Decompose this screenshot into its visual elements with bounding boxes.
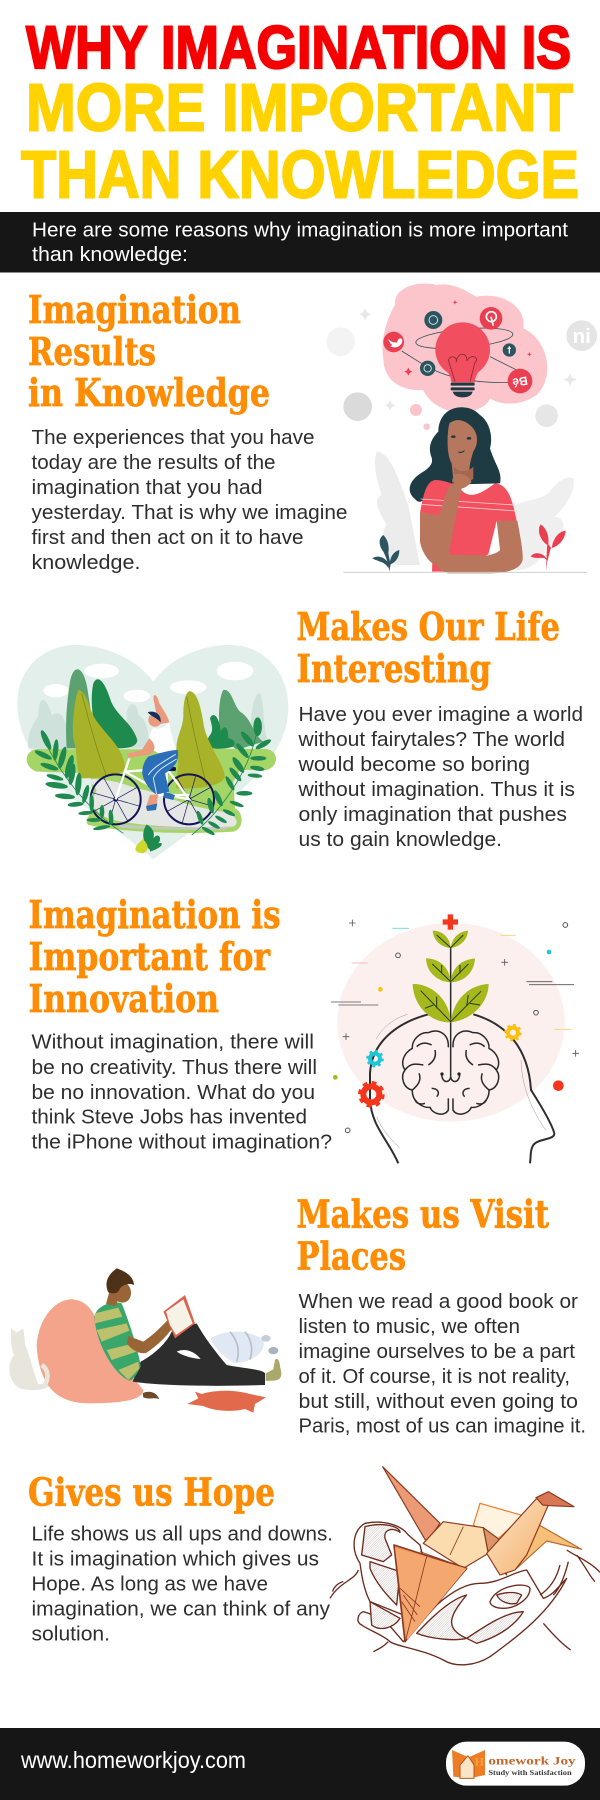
brain [403, 1031, 499, 1114]
text block: without imagination. Thus it is [297, 778, 575, 801]
text block: When we read a good book or [298, 1290, 578, 1313]
text block [32, 1522, 333, 1646]
heading [28, 287, 270, 415]
pink circle [337, 923, 565, 1122]
illustration: head with growing plant [331, 914, 579, 1163]
heading: Makes us Visit [296, 1192, 549, 1236]
cat [9, 1328, 50, 1390]
fern branches [34, 717, 272, 836]
text block: but still, without even going to [298, 1390, 578, 1413]
text block [32, 426, 348, 574]
faint social icons: ni [572, 325, 591, 348]
text block: be no creativity. Thus there will [32, 1056, 317, 1079]
text block: first and then act on it to have [32, 526, 304, 549]
rider [127, 695, 178, 811]
text block: only imagination that pushes [298, 803, 567, 826]
heading: Imagination is [28, 892, 280, 937]
illustration: person reading on beanbag [9, 1268, 281, 1413]
panel: imagination is important for innovation [28, 892, 579, 1163]
ground [27, 749, 276, 833]
heading: Places [296, 1234, 406, 1278]
heading: Important for [28, 934, 271, 979]
heading: Results [28, 329, 156, 374]
text block: imagination that you had [32, 476, 262, 499]
clouds [43, 662, 253, 702]
panel: makes us visit places [9, 1192, 586, 1438]
app icons [383, 300, 532, 393]
text block: think Steve Jobs has invented [32, 1106, 307, 1128]
thought cloud [382, 284, 547, 413]
text block: solution. [32, 1622, 110, 1646]
text block: Without imagination, there will [32, 1030, 314, 1054]
orbits [402, 325, 517, 383]
heading [296, 1192, 549, 1278]
faint social icons [326, 308, 597, 427]
text block: It is imagination which gives us [32, 1548, 319, 1570]
text block: be no innovation. What do you [32, 1081, 315, 1104]
beanbag [37, 1299, 143, 1403]
pillow [211, 1332, 278, 1363]
heading: Innovation [28, 976, 219, 1021]
icon: open book: H [475, 1755, 485, 1769]
light bulb [435, 322, 490, 397]
text block: imagine ourselves to be a part [298, 1340, 575, 1363]
background foliage [28, 669, 268, 750]
arm [127, 1317, 178, 1353]
heading: Interesting [296, 646, 491, 691]
intro band [0, 212, 600, 272]
hands [354, 1522, 567, 1665]
heading: Gives us Hope [28, 1470, 275, 1514]
shirt [94, 1302, 141, 1381]
hand on floor [143, 1392, 159, 1399]
text block: the iPhone without imagination? [32, 1130, 332, 1154]
bicycle [85, 758, 220, 830]
text block: without fairytales? The world [297, 728, 565, 751]
logo [446, 1742, 585, 1786]
head outline [370, 1014, 554, 1163]
text block: Paris, most of us can imagine it. [298, 1414, 586, 1438]
text block: knowledge. [32, 551, 140, 574]
decorative marks [331, 914, 579, 1148]
text block: imagination, we can think of any [32, 1598, 331, 1620]
illustration: thinking woman [326, 284, 597, 573]
text block [298, 1290, 586, 1438]
text block: listen to music, we often [298, 1315, 520, 1338]
website url: www.homeworkjoy.com [20, 1747, 246, 1773]
cushion [187, 1391, 266, 1413]
text block: today are the results of the [32, 451, 276, 474]
illustration: origami crane in hands [330, 1467, 600, 1665]
title [21, 14, 579, 212]
logo: omework Joy [488, 1753, 576, 1767]
panel: makes our life interesting [17, 604, 583, 859]
logo: Study with Satisfaction [488, 1769, 572, 1777]
heading [28, 892, 280, 1021]
illustration: cyclist in heart [17, 645, 288, 859]
head [106, 1268, 134, 1306]
face [448, 420, 477, 480]
text block: Life shows us all ups and downs. [32, 1522, 333, 1546]
plants and ground [343, 524, 587, 572]
panel: imagination results in knowledge [28, 284, 597, 574]
text block: yesterday. That is why we imagine [32, 501, 348, 524]
text block: would become so boring [297, 753, 530, 776]
intro band: Here are some reasons why imagination is more important [32, 218, 568, 242]
panel: gives us hope [28, 1467, 600, 1665]
heading: in Knowledge [28, 370, 270, 415]
text block: The experiences that you have [32, 426, 314, 449]
text block: Have you ever imagine a world [298, 703, 583, 726]
text block: of it. Of course, it is not reality, [298, 1365, 570, 1388]
text block: Hope. As long as we have [32, 1572, 268, 1596]
heading [296, 604, 560, 691]
app icons: Bé [511, 373, 529, 390]
olive bushes [73, 690, 125, 778]
text block [297, 703, 583, 851]
intro band: than knowledge: [32, 243, 188, 266]
text block: us to gain knowledge. [298, 828, 502, 851]
hair [410, 407, 501, 502]
arms [420, 512, 443, 565]
heading: Imagination [28, 287, 241, 332]
legs [133, 1323, 265, 1386]
back leaves [375, 452, 420, 565]
plant [413, 931, 489, 1077]
roots [330, 1550, 600, 1652]
book [163, 1295, 195, 1338]
foot [266, 1359, 281, 1381]
heart background [17, 645, 288, 859]
bottom plant [135, 824, 162, 853]
footer band [0, 1728, 600, 1800]
shirt [420, 480, 517, 572]
text block [32, 1030, 332, 1154]
crane [383, 1467, 582, 1642]
gears [360, 1025, 521, 1106]
